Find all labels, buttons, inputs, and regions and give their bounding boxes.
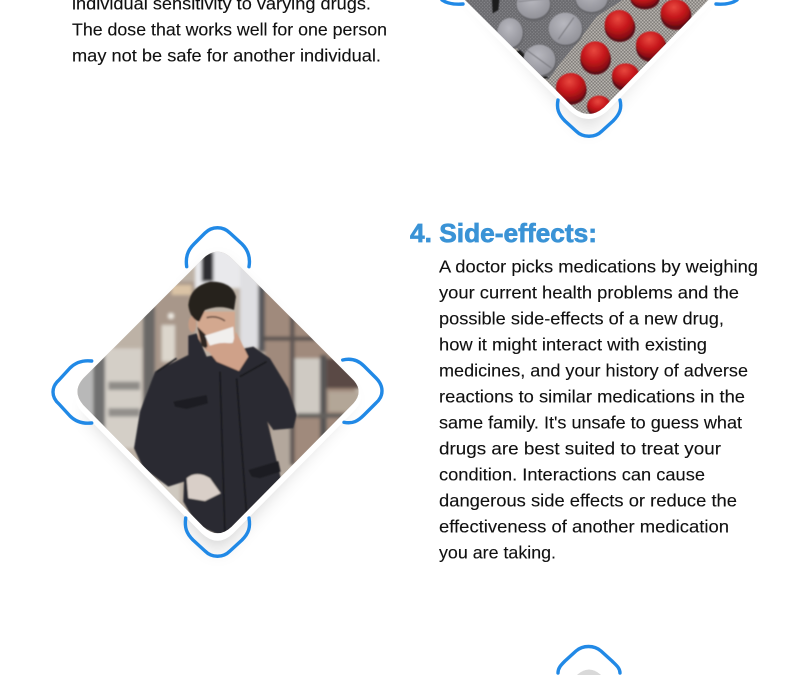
panel: pills photo diamond	[453, 0, 720, 132]
text block: side-effects paragraph: how it might interact with existing	[439, 334, 707, 354]
photo: man in dark jacket and face mask covering his mouth	[70, 245, 363, 538]
photo: blister packs of gray and red tablets	[465, 0, 708, 114]
text block: side-effects paragraph	[439, 256, 758, 562]
jacket	[134, 333, 297, 538]
icon: man diamond blue corner brackets	[53, 228, 382, 556]
panel: next section diamond top	[558, 646, 620, 675]
text block: side-effects paragraph: effectiveness of another medication	[439, 516, 729, 536]
text block: dose sensitivity paragraph: The dose that works well for one person	[72, 20, 387, 40]
hand	[206, 332, 248, 371]
face mask	[205, 327, 234, 347]
text block: side-effects paragraph: you are taking.	[439, 542, 556, 562]
text block: side-effects paragraph: same family. It's unsafe to guess what	[439, 412, 742, 432]
text block: dose sensitivity paragraph: may not be safe for another individual.	[72, 46, 381, 66]
text block: side-effects paragraph: drugs are best suited to treat your	[439, 438, 721, 458]
text block: side-effects paragraph: medicines, and your history of adverse	[439, 360, 748, 380]
text block: side-effects paragraph: possible side-effects of a new drug,	[439, 308, 724, 328]
panel: man coughing photo diamond	[70, 245, 363, 552]
text block: dose sensitivity paragraph	[72, 0, 387, 66]
text block: side-effects paragraph: A doctor picks medications by weighing	[439, 256, 758, 276]
text block: side-effects paragraph: reactions to similar medications in the	[439, 386, 745, 406]
text block: side-effects paragraph: dangerous side effects or reduce the	[439, 490, 737, 510]
icon: pills diamond blue corner brackets	[442, 0, 737, 136]
head	[197, 312, 235, 352]
text block: side-effects paragraph: your current health problems and the	[439, 282, 739, 302]
heading: 4. Side-effects: 4. Side-effects:	[410, 218, 597, 248]
text block: side-effects paragraph: condition. Interactions can cause	[439, 464, 705, 484]
